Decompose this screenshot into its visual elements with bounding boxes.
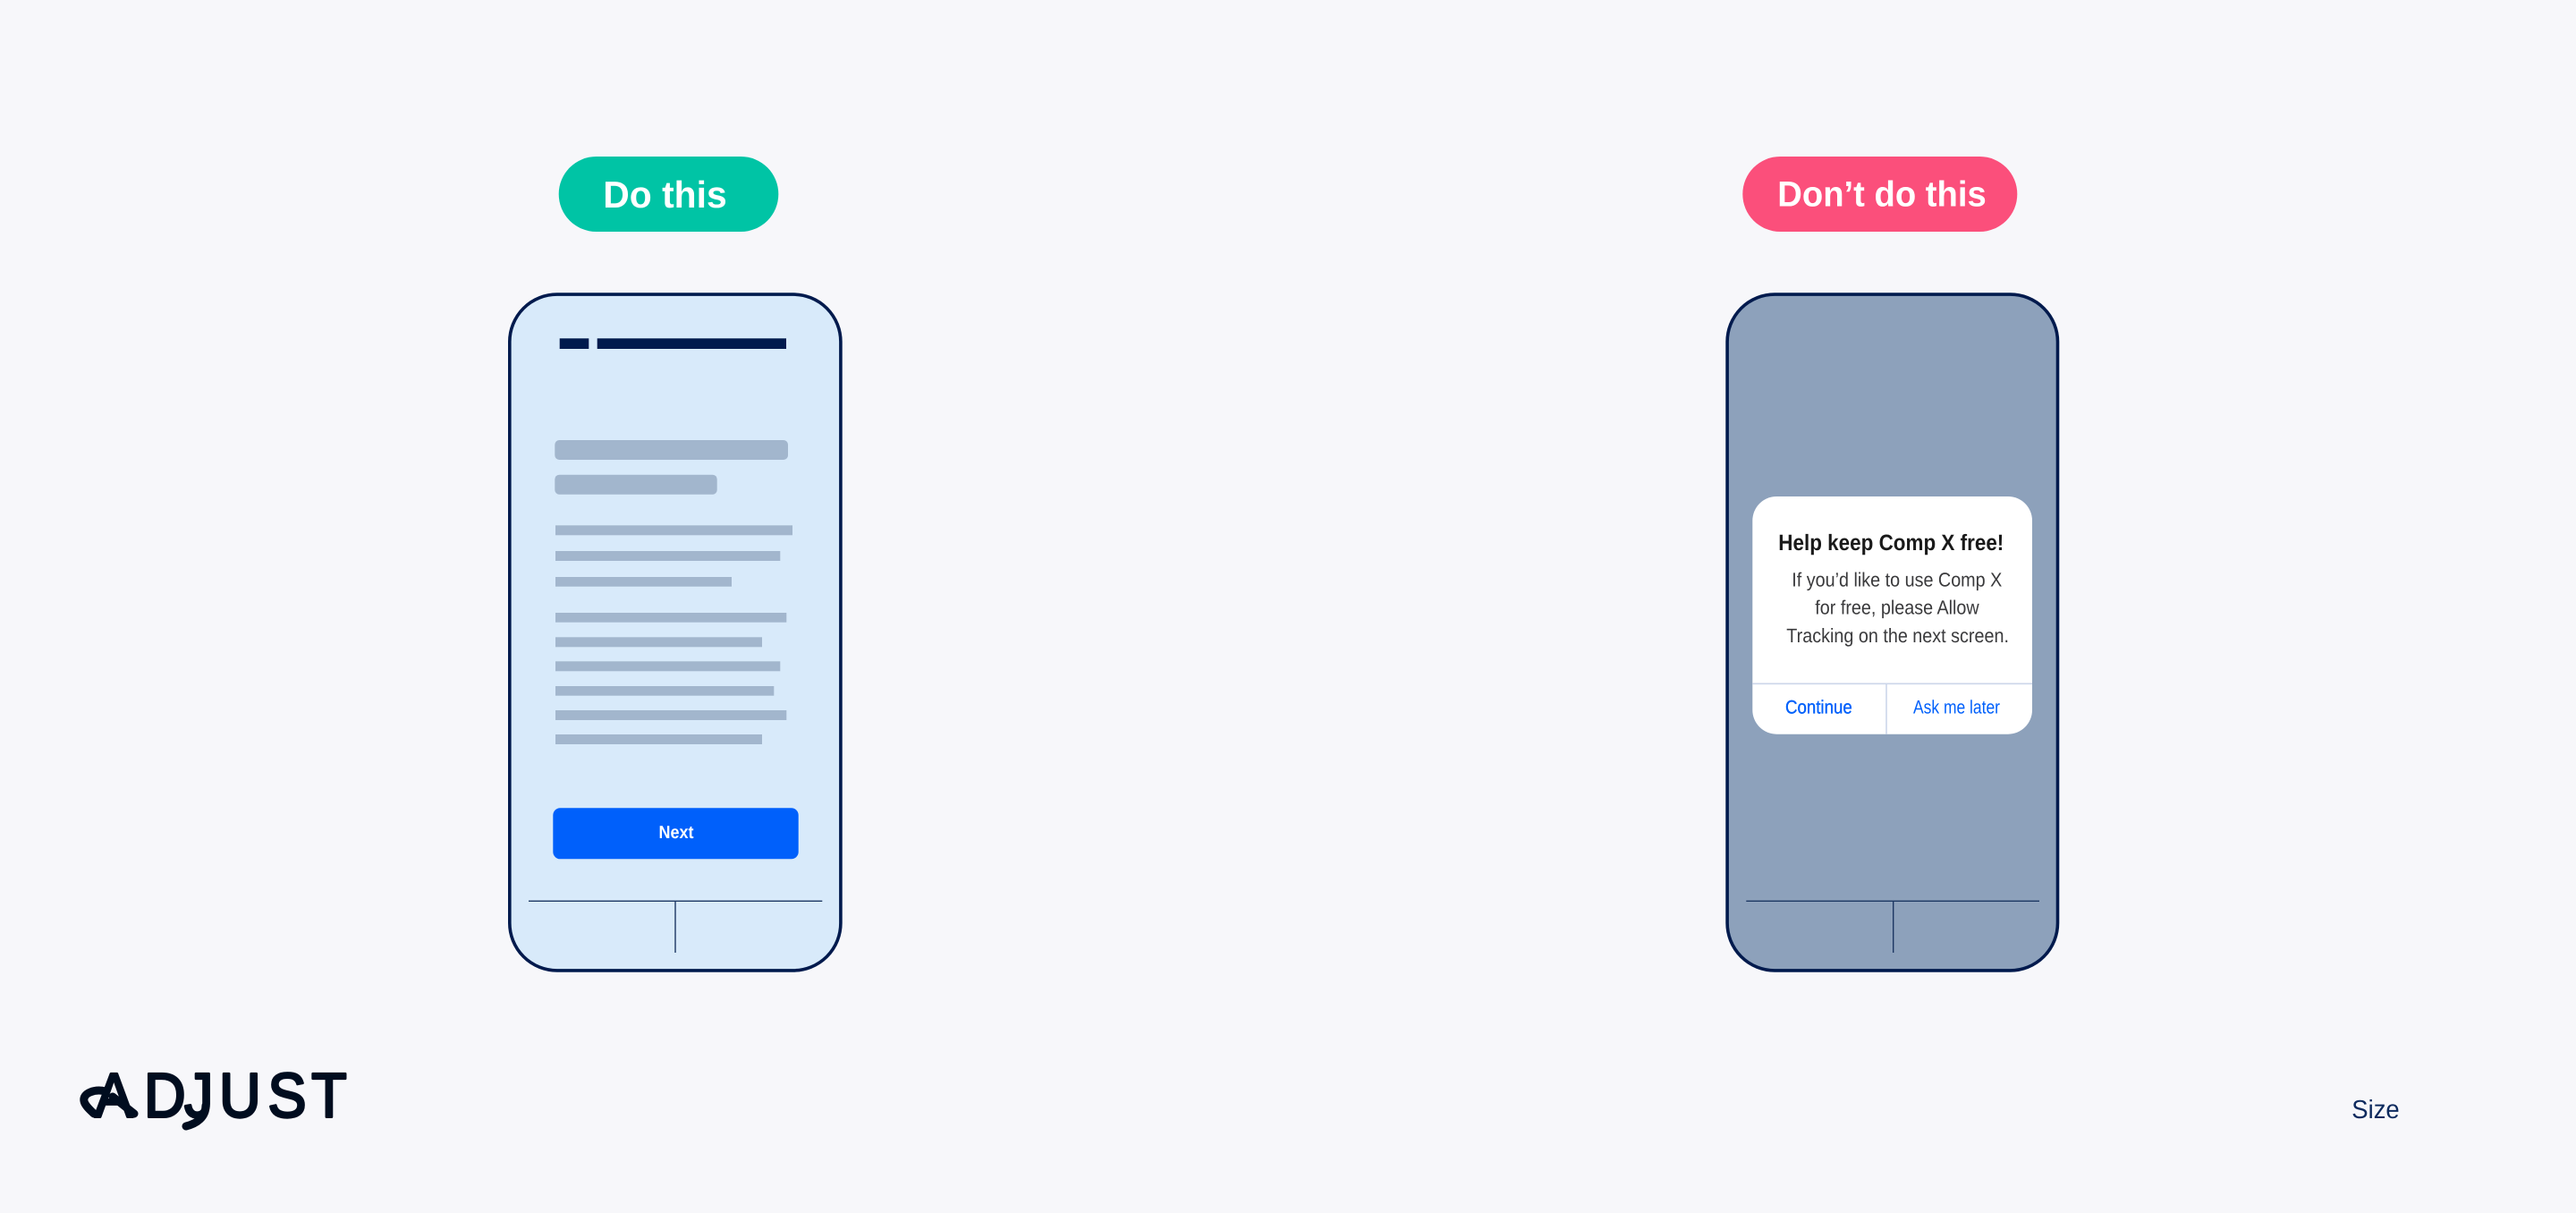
phone frame: dimmed screen (1727, 294, 2057, 971)
panel: do this phone (510, 294, 841, 971)
badge: don't do this (1742, 157, 2017, 232)
phone frame: light screen (510, 294, 841, 971)
panel: don't do this phone (1727, 294, 2057, 971)
dialog body text (1786, 569, 2009, 647)
continue action: Continue (1785, 697, 1852, 717)
next button: Next (658, 823, 694, 843)
logo: Adjust: ADJUST (95, 1061, 347, 1131)
placeholder paragraph one (555, 525, 792, 587)
next button (553, 808, 799, 859)
dialog dividers (1752, 683, 2032, 734)
status bar (560, 338, 786, 349)
placeholder heading (555, 440, 788, 495)
placeholder paragraph two (555, 613, 786, 744)
badge: don't do this: Don’t do this (1777, 175, 1987, 215)
badge: do this (559, 157, 778, 232)
bottom toolbar lines (1746, 901, 2039, 953)
dialog title: Help keep Comp X free! (1778, 530, 2004, 556)
size label: Size (2351, 1096, 2400, 1124)
dialog body text: for free, please Allow (1815, 597, 1979, 619)
ask me later action: Ask me later (1913, 697, 2000, 717)
dialog body text: If you’d like to use Comp X (1792, 569, 2003, 591)
badge: do this: Do this (603, 174, 727, 216)
pre-permission dialog (1752, 496, 2032, 734)
bottom toolbar lines (529, 901, 822, 953)
dialog body text: Tracking on the next screen. (1786, 624, 2009, 647)
